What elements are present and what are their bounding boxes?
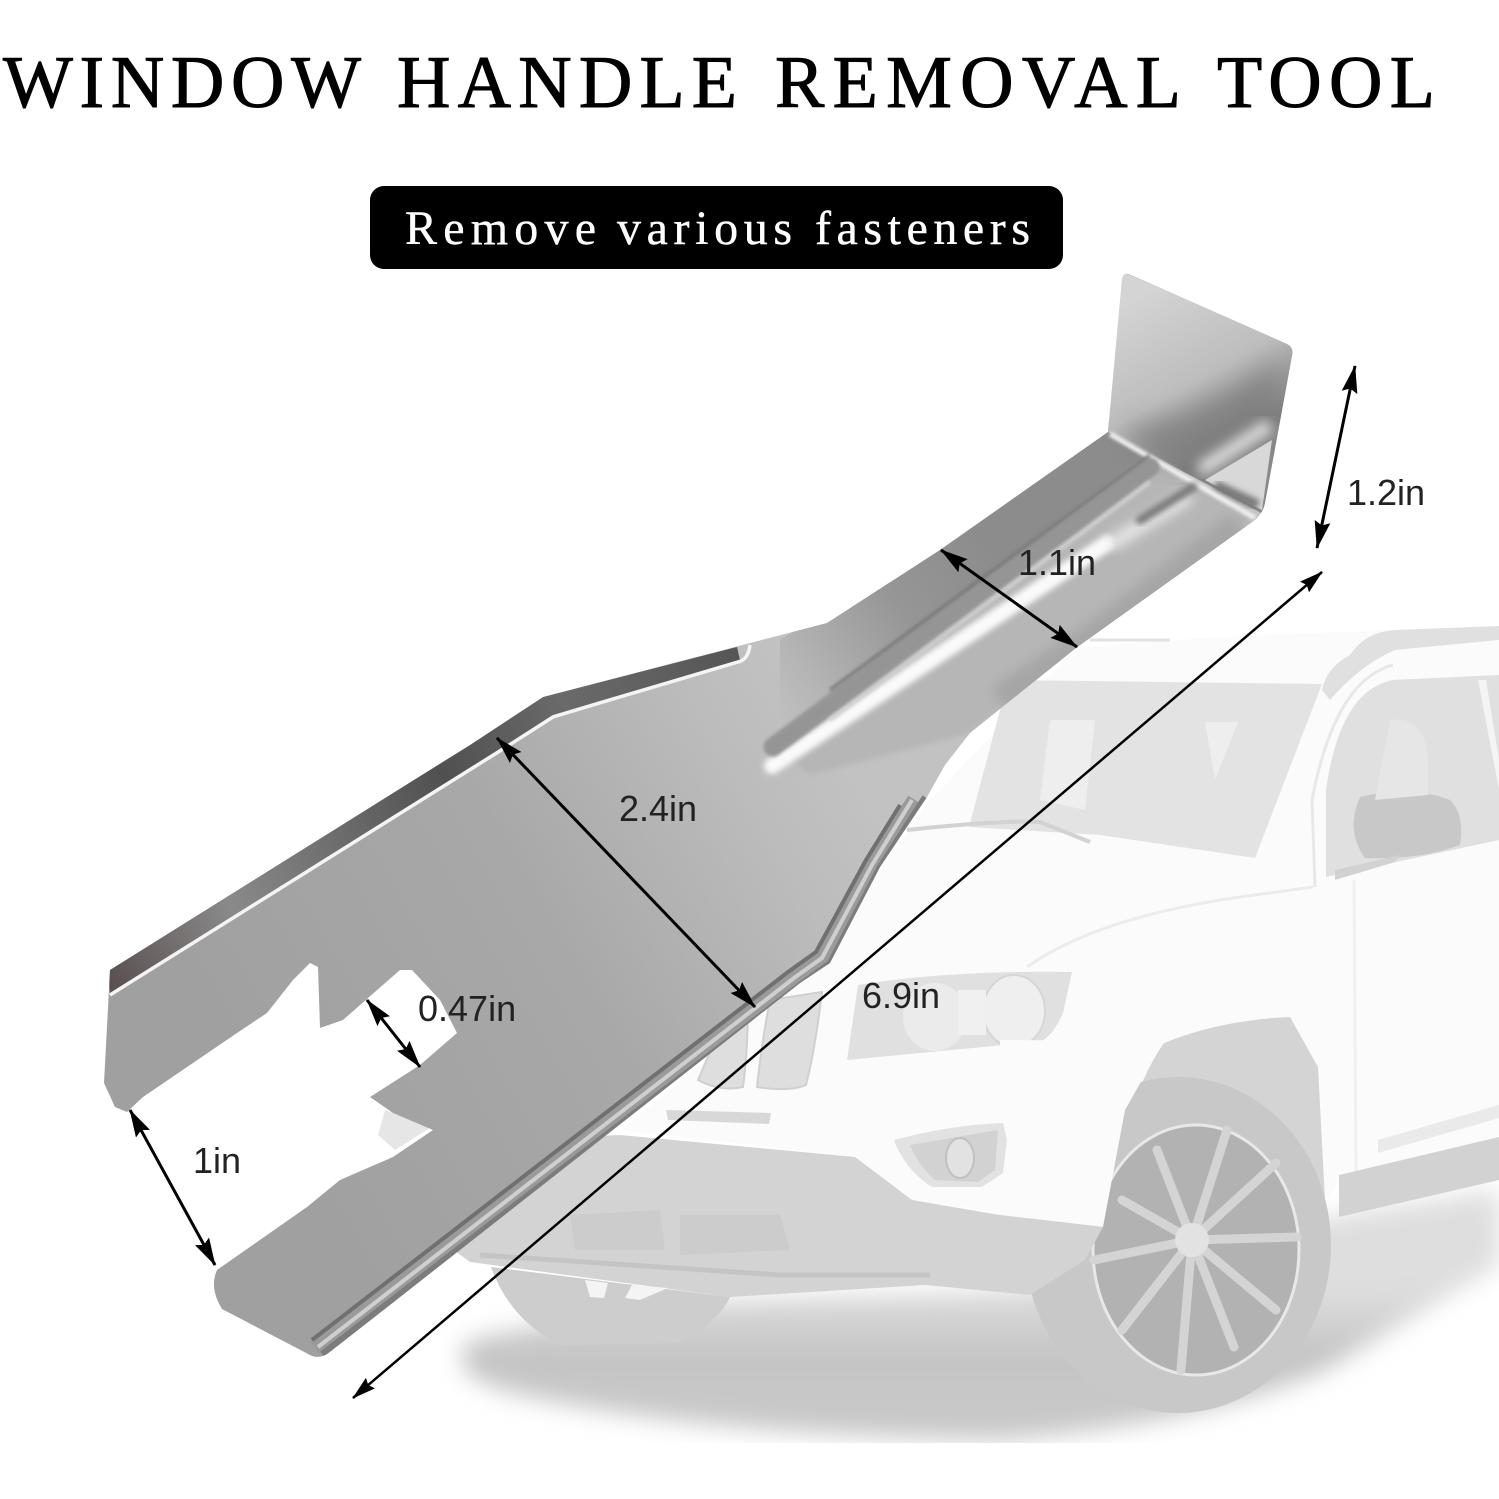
roof rail bbox=[1322, 626, 1499, 700]
windshield bbox=[969, 680, 1322, 858]
window handle removal tool bbox=[104, 272, 1295, 1357]
flange shadow bbox=[1120, 360, 1282, 463]
handle lower band bbox=[770, 455, 1255, 775]
lower right rail bbox=[312, 797, 925, 1354]
rocker panel bbox=[1339, 1137, 1499, 1217]
fog lamp bbox=[946, 1138, 974, 1178]
arrow: 1.2in flange height bbox=[1317, 366, 1355, 548]
arrow: 1.1in handle width bbox=[941, 550, 1077, 647]
upper edge strip bbox=[108, 647, 740, 993]
arrow: 6.9in overall length bbox=[353, 572, 1322, 1398]
door window bbox=[1326, 675, 1499, 877]
label: 2.4in: 2.4in bbox=[619, 788, 697, 829]
bumper lower lip bbox=[480, 1255, 930, 1275]
rail band bbox=[315, 800, 915, 1348]
headlight lens inner bbox=[903, 983, 967, 1051]
fog light inner bbox=[910, 1130, 998, 1182]
facet shadow bbox=[1215, 485, 1258, 505]
wheel well bbox=[1142, 1017, 1325, 1198]
title bbox=[3, 42, 1435, 124]
fender over tyre bbox=[1000, 1040, 1141, 1227]
front wheel bbox=[1025, 1077, 1331, 1413]
arrow: 0.47in notch bbox=[367, 1000, 420, 1067]
lower handle shade bbox=[1000, 525, 1240, 700]
title: WINDOW bbox=[3, 42, 361, 124]
hub bbox=[1175, 1223, 1209, 1257]
arrow: 1in jaw opening bbox=[130, 1110, 215, 1265]
fog light housing bbox=[894, 1123, 1007, 1187]
light gaps beneath car bbox=[585, 1280, 668, 1300]
ground shadow bbox=[462, 1190, 1499, 1440]
bumper vents bbox=[570, 1210, 790, 1255]
left front tyre bbox=[491, 1267, 730, 1335]
flange bbox=[1108, 272, 1295, 515]
spokes bbox=[1094, 1130, 1297, 1370]
faded car photo background bbox=[378, 626, 1499, 1440]
upper highlight bbox=[1110, 495, 1190, 545]
title: REMOVAL bbox=[775, 42, 1181, 124]
rail light bbox=[318, 800, 912, 1347]
door gap bbox=[1354, 880, 1356, 1175]
grille slot bbox=[757, 992, 822, 1089]
rail outer bbox=[322, 797, 925, 1354]
tool silhouette bbox=[104, 274, 1292, 1357]
windshield interior bbox=[1040, 720, 1238, 810]
mirror bbox=[1354, 792, 1461, 858]
subtitle badge: Remove bbox=[405, 202, 596, 255]
flange lower facet bbox=[1205, 440, 1272, 510]
label: 1in: 1in bbox=[193, 1140, 241, 1181]
window frame bbox=[1312, 665, 1393, 887]
roof line bbox=[1090, 638, 1170, 642]
arrow: 2.4in body width bbox=[497, 738, 755, 1007]
rail inner bbox=[312, 805, 900, 1340]
door trim bbox=[1378, 1105, 1499, 1153]
groove edge bbox=[830, 482, 1150, 720]
subtitle badge: various bbox=[617, 202, 792, 255]
bumper bar bbox=[666, 1110, 771, 1124]
bend crease bbox=[1110, 434, 1255, 518]
fender line bbox=[1027, 887, 1313, 967]
car part seen through notch bbox=[378, 1110, 430, 1150]
second groove bbox=[1140, 487, 1193, 520]
wiper bbox=[907, 822, 1090, 842]
subtitle badge bbox=[370, 186, 1063, 269]
flange highlight bbox=[1200, 425, 1270, 470]
white gap below strip bbox=[110, 645, 750, 995]
upper shoulder shade bbox=[780, 420, 1150, 740]
tool surface shading bbox=[108, 272, 1295, 1354]
groove dark line bbox=[830, 455, 1150, 690]
headlight bbox=[847, 972, 1072, 1060]
seat in window bbox=[1375, 792, 1428, 800]
grille slot left bbox=[696, 1024, 749, 1090]
label: 1.1in: 1.1in bbox=[1018, 542, 1096, 583]
window pillar bbox=[1478, 680, 1499, 790]
headlight lens outer bbox=[983, 975, 1045, 1047]
label: 0.47in: 0.47in bbox=[418, 988, 516, 1029]
mirror base bbox=[1335, 855, 1400, 880]
groove bbox=[773, 467, 1150, 747]
subtitle badge: fasteners bbox=[815, 202, 1030, 255]
label: 6.9in: 6.9in bbox=[862, 975, 940, 1016]
tyre bbox=[1025, 1077, 1331, 1413]
title: TOOL bbox=[1217, 42, 1435, 124]
car body bbox=[620, 628, 1499, 1227]
bright highlight bbox=[772, 543, 1107, 766]
lower bumper bbox=[440, 1135, 1103, 1297]
rim bbox=[1093, 1125, 1299, 1375]
headlight centre bbox=[958, 990, 986, 1035]
label: 1.2in: 1.2in bbox=[1347, 472, 1425, 513]
title: HANDLE bbox=[397, 42, 737, 124]
